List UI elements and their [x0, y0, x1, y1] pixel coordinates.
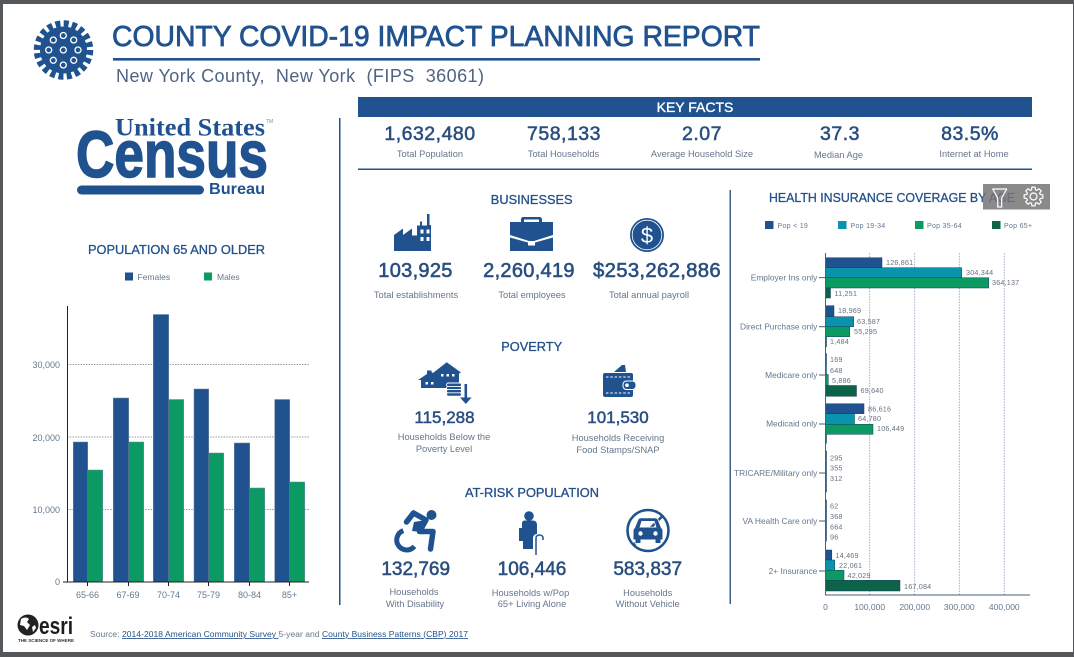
x axis labels: 100,000 [854, 602, 885, 612]
legend: Pop 19-34 [850, 223, 886, 230]
value labels: 368 [830, 512, 843, 521]
value labels: 364,137 [992, 278, 1019, 287]
value labels: 664 [830, 522, 843, 532]
medicare bars [826, 354, 856, 396]
stat: households below poverty level [398, 408, 490, 454]
fact: median age [814, 123, 863, 160]
subtitle: New York County, New York (FIPS 36061) [116, 66, 484, 86]
icon: filter [993, 189, 1007, 207]
source note: Source: 2014-2018 American Community Survey 5-year and County Business Patterns (CBP) 2017 [90, 629, 468, 639]
heading: at-risk population: AT-RISK POPULATION [465, 485, 599, 500]
logo: United States Census Bureau: Census [76, 117, 268, 191]
stat: households receiving food stamps: Food Stamps/SNAP [576, 445, 660, 455]
fact: average household size: Average Household Size [651, 149, 753, 159]
value labels: 1,484 [830, 337, 849, 346]
stat: households with disability [381, 559, 450, 609]
stat: total establishments: 103,925 [378, 260, 453, 282]
logo: United States Census Bureau: United States [115, 112, 265, 142]
icon: factory [394, 214, 431, 251]
fact: total households [527, 123, 601, 159]
fact: internet at home: 83.5% [941, 123, 999, 145]
category labels: 2+ Insurance [769, 566, 818, 576]
stat: households below poverty level: 115,288 [414, 408, 475, 427]
stat: total establishments: Total establishments [374, 290, 458, 300]
stat: households living alone: Households w/Pop [492, 588, 569, 598]
logo: esri [18, 613, 74, 643]
stat: total annual payroll [593, 260, 721, 300]
x axis labels [76, 590, 297, 600]
direct purchase bars [826, 306, 854, 347]
stat: households without vehicle: Without Vehicle [616, 599, 680, 609]
y axis labels: 30,000 [32, 360, 60, 370]
category labels: Direct Purchase only [740, 322, 818, 332]
stat: households receiving food stamps: Households Receiving [572, 433, 664, 443]
stat: households with disability: Households [389, 587, 439, 597]
toolbar overlay: filter and settings [983, 184, 1050, 210]
y axis labels: 0 [55, 577, 60, 587]
legend: Males [217, 272, 240, 282]
x axis labels: 0 [823, 602, 828, 612]
stat: households receiving food stamps: 101,530 [587, 408, 649, 427]
stat: households living alone [492, 559, 569, 609]
gridlines [870, 253, 1004, 595]
fact: total population: Total Population [397, 149, 463, 159]
value labels: 11,251 [834, 289, 857, 298]
fact: total population: 1,632,480 [384, 123, 476, 145]
stat: households receiving food stamps [572, 408, 664, 455]
value labels: 64,780 [858, 414, 881, 423]
va bars [826, 500, 827, 541]
gridlines [67, 364, 310, 510]
value labels: 126,861 [886, 258, 913, 267]
value labels: 18,969 [838, 306, 861, 315]
fact: median age: 37.3 [820, 123, 860, 145]
value labels: 22,061 [839, 561, 862, 570]
value labels: 69,640 [860, 386, 884, 395]
key facts banner [358, 97, 1032, 117]
chart title: HEALTH INSURANCE COVERAGE BY AGE [769, 190, 1015, 205]
logo: esri: THE SCIENCE OF WHERE [18, 638, 74, 643]
title rule [113, 58, 760, 61]
fact: average household size: 2.07 [682, 123, 722, 145]
category labels: Medicare only [765, 370, 818, 380]
value labels: 14,469 [836, 551, 859, 560]
value labels: 62 [830, 502, 838, 510]
legend: Pop 65+ [1004, 223, 1032, 230]
stat: households with disability: 132,769 [381, 559, 450, 580]
icon: dollar coin [630, 218, 664, 252]
category labels: VA Health Care only [743, 516, 818, 526]
value labels: 169 [830, 355, 843, 364]
heading: businesses: BUSINESSES [491, 192, 573, 207]
tricare bars [826, 451, 827, 492]
stat: total establishments [374, 260, 458, 300]
icon: settings gear [1024, 187, 1043, 206]
legend [765, 221, 1032, 230]
fact: total households: 758,133 [527, 123, 601, 145]
value labels: 55,295 [854, 327, 877, 336]
legend [125, 272, 240, 282]
logo: United States Census Bureau: Bureau [209, 181, 265, 198]
fact: average household size [651, 123, 753, 159]
fact: internet at home [939, 123, 1009, 159]
value labels: 167,084 [904, 582, 931, 591]
panel: at-risk population [381, 485, 682, 609]
x axis labels: 85+ [282, 590, 297, 600]
x axis labels: 200,000 [899, 602, 930, 612]
stat: total employees [483, 260, 575, 300]
legend: Females [138, 272, 170, 282]
category labels: Medicaid only [766, 418, 818, 428]
icon: no vehicle [628, 510, 668, 551]
value labels: 355 [830, 464, 843, 472]
x axis labels: 80-84 [238, 590, 261, 600]
value labels: 295 [830, 454, 843, 462]
icon: houses with coins and down arrow [418, 362, 472, 404]
value labels: 106,449 [877, 424, 904, 433]
chart title: POPULATION 65 AND OLDER [88, 242, 265, 257]
medicaid bars [826, 404, 873, 443]
x axis labels [823, 602, 1020, 612]
fact: internet at home: Internet at Home [939, 149, 1009, 159]
value labels [830, 258, 1019, 591]
stat: households below poverty level: Poverty Level [416, 444, 472, 454]
panel: population 65 and older chart [32, 242, 310, 600]
x axis labels: 70-74 [157, 590, 180, 600]
fact: total households: Total Households [528, 149, 600, 159]
value labels: 96 [830, 532, 838, 542]
stat: total employees: 2,260,419 [483, 260, 575, 282]
fact: total population [384, 123, 476, 159]
icon: wheelchair [397, 510, 436, 550]
category labels [734, 272, 818, 576]
category labels: Employer Ins only [751, 272, 818, 282]
stat: households living alone: 65+ Living Alone [498, 599, 566, 609]
y axis labels: 20,000 [32, 433, 60, 443]
divider: left column [339, 118, 340, 605]
logo: United States Census Bureau: TM [266, 119, 273, 125]
stat: total annual payroll: $253,262,886 [593, 260, 721, 282]
value labels: 42,029 [848, 571, 871, 580]
x axis labels: 65-66 [76, 590, 99, 600]
value labels: 63,587 [857, 317, 880, 326]
stat: households without vehicle: Households [623, 588, 673, 598]
icon: briefcase [510, 217, 553, 251]
panel: key facts [358, 97, 1032, 160]
y axis labels: 10,000 [32, 505, 60, 515]
x axis labels: 75-79 [197, 590, 220, 600]
x axis labels: 300,000 [944, 602, 975, 612]
2+ insurance bars [826, 550, 900, 591]
divider: right column [730, 190, 731, 604]
icon: elderly person with cane [519, 511, 543, 555]
fact: median age: Median Age [814, 150, 863, 160]
value labels: 648 [830, 366, 843, 375]
heading: poverty: POVERTY [501, 339, 563, 354]
stat: households without vehicle: 583,837 [613, 559, 682, 580]
stat: total employees: Total employees [498, 290, 566, 300]
category labels: TRICARE/Military only [734, 468, 818, 478]
axes [819, 253, 1030, 595]
value labels: 86,616 [868, 404, 891, 414]
key facts rule [358, 168, 1032, 170]
employer insurance bars [826, 258, 989, 298]
bars [826, 258, 989, 591]
value labels: 312 [830, 474, 843, 483]
icon: dollar coin: $ [641, 223, 653, 248]
icon: virus logo [37, 24, 90, 76]
x axis labels: 67-69 [116, 590, 140, 600]
logo: esri: esri [39, 613, 73, 640]
x axis labels: 400,000 [989, 602, 1020, 612]
panel: businesses [374, 192, 721, 300]
axes [63, 306, 309, 586]
y axis labels [32, 360, 60, 587]
key facts heading: KEY FACTS [657, 99, 733, 115]
legend: Pop < 19 [778, 223, 808, 230]
icon: wallet [603, 365, 636, 397]
panel: health insurance coverage chart [734, 190, 1032, 612]
legend: Pop 35-64 [927, 223, 962, 230]
title: COUNTY COVID-19 IMPACT PLANNING REPORT [112, 21, 760, 53]
stat: households with disability: With Disability [386, 599, 445, 609]
stat: total annual payroll: Total annual payroll [609, 290, 689, 300]
value labels: 5,886 [832, 376, 851, 385]
stat: households without vehicle [613, 559, 682, 609]
panel: poverty [398, 339, 664, 455]
value labels: 304,344 [966, 268, 993, 277]
stat: households below poverty level: Households Below the [398, 432, 490, 442]
stat: households living alone: 106,446 [498, 559, 566, 580]
bars [73, 314, 305, 582]
